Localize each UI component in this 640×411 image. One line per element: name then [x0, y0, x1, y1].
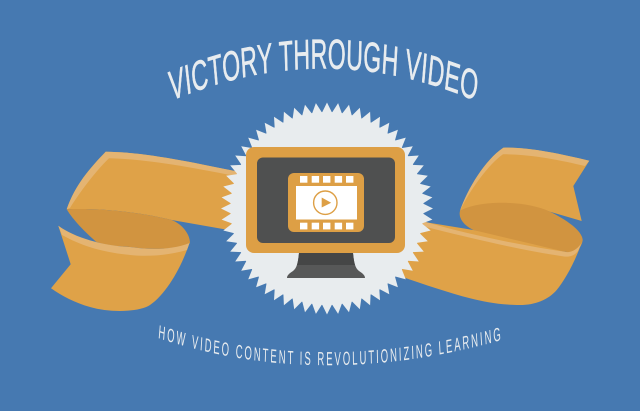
film sprocket holes: [300, 176, 353, 229]
title: VICTORY THROUGH VIDEO: [167, 39, 478, 99]
starburst badge: [221, 102, 433, 314]
monitor stand: [287, 253, 365, 278]
monitor frame: [246, 147, 405, 253]
subtitle: HOW VIDEO CONTENT IS REVOLUTIONIZING LEARNING: [158, 325, 500, 366]
monitor icon: [246, 147, 405, 278]
monitor screen: [257, 158, 395, 243]
right ribbon: [400, 148, 589, 305]
film strip: [288, 173, 364, 232]
icon: play button: [314, 191, 337, 214]
left ribbon: [51, 152, 240, 311]
